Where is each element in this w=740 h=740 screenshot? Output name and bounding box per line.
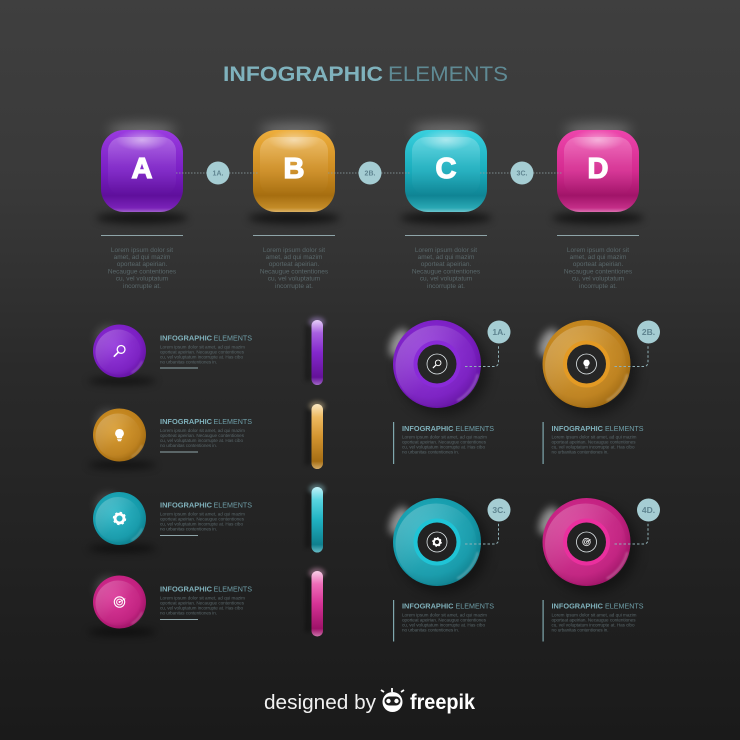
badge: 3C [510,162,534,184]
text block: row 2: no urbanitas contentiones in. [160,443,217,448]
text block: ring 2B: ELEMENTS [605,424,644,433]
text block: row 1: oporteat apeirian. Necaugue contentiones [160,350,245,354]
pill: pink [305,568,325,636]
badge: 3C: 3C. [492,505,506,515]
letter D: D [588,153,608,185]
text block: ring 1A: INFOGRAPHIC [402,424,454,433]
panel: small ball pink [88,576,156,636]
letter C: C [436,153,457,185]
badge: 1A [206,162,230,184]
title: INFOGRAPHIC [223,63,383,86]
text block: column C: oporteat apeirian. [421,261,471,268]
text block: ring 2B [542,422,644,464]
text block: row 4: oporteat apeirian. Necaugue contentiones [160,600,245,606]
text block: column D: cu, vel voluptatum [572,276,624,282]
text block: row 4: cu, vel voluptatum incorrupte at. Has cibo [160,606,243,610]
text block: column C: cu, vel voluptatum [420,276,472,282]
text block: column A: oporteat apeirian. [117,261,167,268]
icon: light bulb [115,429,124,441]
pill: purple [305,317,325,385]
text block: column D: incorrupte at. [579,283,617,290]
text block: row 3: ELEMENTS [214,500,252,510]
text block: column B [253,235,335,290]
text block: row 2: oporteat apeirian. Necaugue contentiones [160,433,245,438]
text block: row 3: oporteat apeirian. Necaugue contentiones [160,516,245,522]
text block: ring 4D: ELEMENTS [605,602,644,610]
text block: column A: incorrupte at. [123,283,161,290]
icon: target [114,597,125,607]
text block: column A: cu, vel voluptatum [116,276,168,282]
text block: ring 1A: Lorem ipsum dolor sit amet, ad qui mazim [402,434,487,440]
text block: ring 4D [542,600,644,642]
text block: ring 3C: ELEMENTS [456,602,494,610]
footer: designed by freepik: designed by [264,691,377,714]
text block: row 4: Lorem ipsum dolor sit amet, ad qui mazim [160,596,245,600]
panel: tile B [248,124,340,224]
badge: 1A: 1A. [213,170,223,178]
text block: ring 1A: ELEMENTS [456,424,494,433]
panel: large ring gold [535,320,660,415]
badge: 3C: 3C. [517,170,527,178]
text block: column D: amet, ad qui mazim [570,254,626,261]
text block: ring 1A [393,422,494,464]
badge: 2B: 2B. [642,327,655,337]
text block: row 2: Lorem ipsum dolor sit amet, ad qui mazim [160,428,245,433]
panel: large ring teal [385,498,510,593]
text block: ring 2B: oporteat apeirian. Necaugue contentiones [552,440,636,444]
footer: designed by freepik: freepik [410,691,475,714]
text block: ring 2B: no urbanitas contentiones in. [552,450,608,454]
icon: gear [433,538,441,546]
text block: row 1: INFOGRAPHIC [160,334,213,342]
text block: column D: Lorem ipsum dolor sit [567,247,629,254]
panel: tile D [552,124,644,224]
text block: column B: Lorem ipsum dolor sit [263,247,325,254]
text block: ring 3C: cu, vel voluptatum incorrupte at. Has cibo [402,622,485,628]
text block: ring 2B: Lorem ipsum dolor sit amet, ad qui mazim [552,434,637,440]
panel: small ball purple [88,324,156,385]
text block: ring 1A: oporteat apeirian. Necaugue contentiones [402,440,487,444]
text block: row 4 [160,584,252,620]
text block: row 4: INFOGRAPHIC [160,584,213,594]
text block: row 2: ELEMENTS [214,417,252,426]
text block: ring 4D: cu, vel voluptatum incorrupte at. Has cibo [552,622,635,628]
text block: column C: amet, ad qui mazim [418,254,474,261]
text block: column B: cu, vel voluptatum [268,276,320,282]
text block: row 2: cu, vel voluptatum incorrupte at. Has cibo [160,438,243,443]
icon: gear [114,513,125,524]
text block: row 4: no urbanitas contentiones in. [160,610,217,616]
text block: row 2: INFOGRAPHIC [160,417,213,426]
icon: light bulb [583,360,590,368]
text block: column B: amet, ad qui mazim [266,254,322,261]
text block: ring 3C [393,600,494,642]
text block: column D [557,235,639,290]
text block: ring 4D: Lorem ipsum dolor sit amet, ad qui mazim [552,612,637,618]
text block: row 3: Lorem ipsum dolor sit amet, ad qui mazim [160,512,245,516]
connector: dotted segments between tiles [176,172,562,174]
text block: row 1: no urbanitas contentiones in. [160,360,217,364]
text block: column B: Necaugue contentiones [260,268,329,276]
text block: column C: incorrupte at. [427,283,465,290]
text block: row 1: Lorem ipsum dolor sit amet, ad qui mazim [160,344,245,350]
text block: row 3: INFOGRAPHIC [160,500,213,510]
badge: 2B [358,162,382,184]
text block: column B: oporteat apeirian. [269,261,319,268]
text block: column C: Necaugue contentiones [412,268,481,276]
badge: 2B: 2B. [365,170,375,178]
icon: magnifier [433,360,441,368]
text block: row 3 [160,500,252,536]
title [223,63,508,86]
text block: ring 3C: INFOGRAPHIC [402,602,454,610]
text block: ring 4D: oporteat apeirian. Necaugue contentiones [552,618,636,622]
icon: freepik mascot [381,688,404,712]
text block: column C [405,235,487,290]
panel: small ball teal [88,492,156,552]
panel: tile A [96,124,188,224]
text block: row 1 [160,334,252,368]
text block: ring 2B: cu, vel voluptatum incorrupte at. Has cibo [552,444,635,450]
pill: gold [305,401,325,469]
text block: column A: Lorem ipsum dolor sit [111,247,173,254]
text block: ring 2B: INFOGRAPHIC [552,424,603,433]
text block: ring 1A: no urbanitas contentiones in. [402,450,459,454]
text block: column C: Lorem ipsum dolor sit [415,247,477,254]
icon: target [583,538,591,546]
text block: ring 3C: Lorem ipsum dolor sit amet, ad qui mazim [402,612,487,618]
text block: ring 3C: oporteat apeirian. Necaugue contentiones [402,618,487,622]
letter A: A [132,153,153,185]
text block: row 2 [160,417,252,452]
text block: row 4: ELEMENTS [214,584,252,594]
panel: large ring pink [535,498,660,593]
pill: teal [305,484,325,552]
text block: column A: amet, ad qui mazim [114,254,170,261]
text block: ring 1A: cu, vel voluptatum incorrupte at. Has cibo [402,444,485,450]
footer: designed by freepik [264,688,475,714]
text block: column D: Necaugue contentiones [564,268,633,276]
panel: large ring purple [385,320,510,415]
text block: column A: Necaugue contentiones [108,268,177,276]
badge: 1A: 1A. [492,327,506,337]
text block: row 1: ELEMENTS [214,334,252,342]
panel: tile C [400,124,492,224]
text block: column B: incorrupte at. [275,283,313,290]
text block: column A [101,235,183,290]
text block: ring 4D: INFOGRAPHIC [552,602,603,610]
letter B: B [284,153,304,185]
panel: small ball gold [88,408,156,469]
badge: 4D: 4D. [642,505,655,515]
text block: column D: oporteat apeirian. [573,261,623,268]
text block: ring 3C: no urbanitas contentiones in. [402,628,459,632]
text block: row 3: cu, vel voluptatum incorrupte at. Has cibo [160,522,243,526]
text block: row 1: cu, vel voluptatum incorrupte at. Has cibo [160,354,243,360]
text block: ring 4D: no urbanitas contentiones in. [552,628,608,632]
title: ELEMENTS [388,63,508,86]
text block: row 3: no urbanitas contentiones in. [160,526,217,532]
icon: magnifier [114,346,125,356]
